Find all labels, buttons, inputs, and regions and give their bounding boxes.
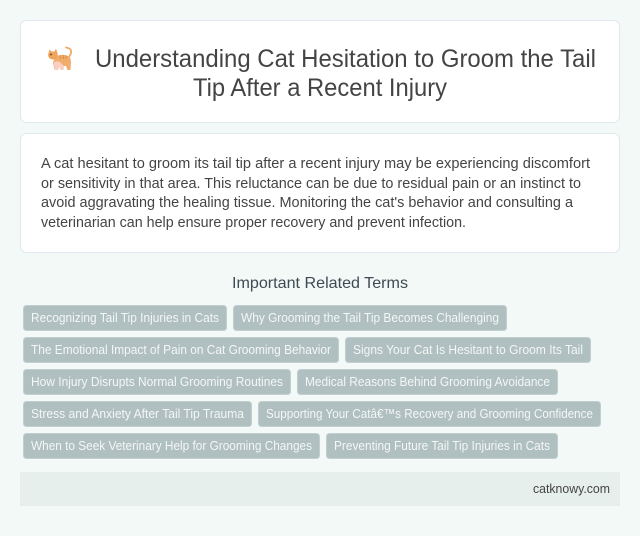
tag (24, 402, 252, 426)
title text: Understanding Cat Hesitation to Groom the Tail (95, 45, 596, 73)
tag (258, 402, 600, 426)
title text (95, 45, 596, 102)
heading: important related terms: Important Related Terms (232, 275, 408, 292)
tag (24, 306, 226, 330)
tag (346, 338, 590, 362)
tag: When to Seek Veterinary Help for Grooming Changes (31, 438, 312, 453)
description text: or sensitivity in that area. This reluctance can be due to residual pain or an instinct to (41, 175, 581, 192)
tag: Stress and Anxiety After Tail Tip Trauma (31, 406, 245, 421)
tag (234, 306, 506, 330)
panel: description (20, 134, 620, 252)
tag: Signs Your Cat Is Hesitant to Groom Its Tail (353, 342, 583, 357)
description text: avoid aggravating the healing tissue. Monitoring the cat's behavior and consulting a (41, 194, 574, 211)
tag: Recognizing Tail Tip Injuries in Cats (31, 310, 219, 325)
icon: cat (48, 48, 71, 70)
tag: Why Grooming the Tail Tip Becomes Challenging (241, 310, 499, 325)
description text: veterinarian can help ensure proper recovery and prevent infection. (41, 214, 466, 231)
tag (298, 370, 558, 394)
tag: Preventing Future Tail Tip Injuries in Cats (334, 438, 550, 453)
tag (24, 370, 290, 394)
panel: title card (20, 20, 620, 122)
tag list (24, 306, 600, 458)
footer source text: catknowy.com (533, 481, 610, 496)
tag (24, 434, 320, 458)
tag: Supporting Your Catâ€™s Recovery and Grooming Confidence (266, 406, 593, 421)
description text (41, 155, 591, 231)
footer (20, 472, 620, 506)
description text: A cat hesitant to groom its tail tip after a recent injury may be experiencing discomfort (41, 155, 591, 172)
tag (326, 434, 558, 458)
tag: Medical Reasons Behind Grooming Avoidance (305, 374, 550, 389)
title text: Tip After a Recent Injury (193, 74, 447, 102)
tag: The Emotional Impact of Pain on Cat Grooming Behavior (31, 342, 332, 357)
tag (24, 338, 338, 362)
tag: How Injury Disrupts Normal Grooming Routines (31, 374, 283, 389)
